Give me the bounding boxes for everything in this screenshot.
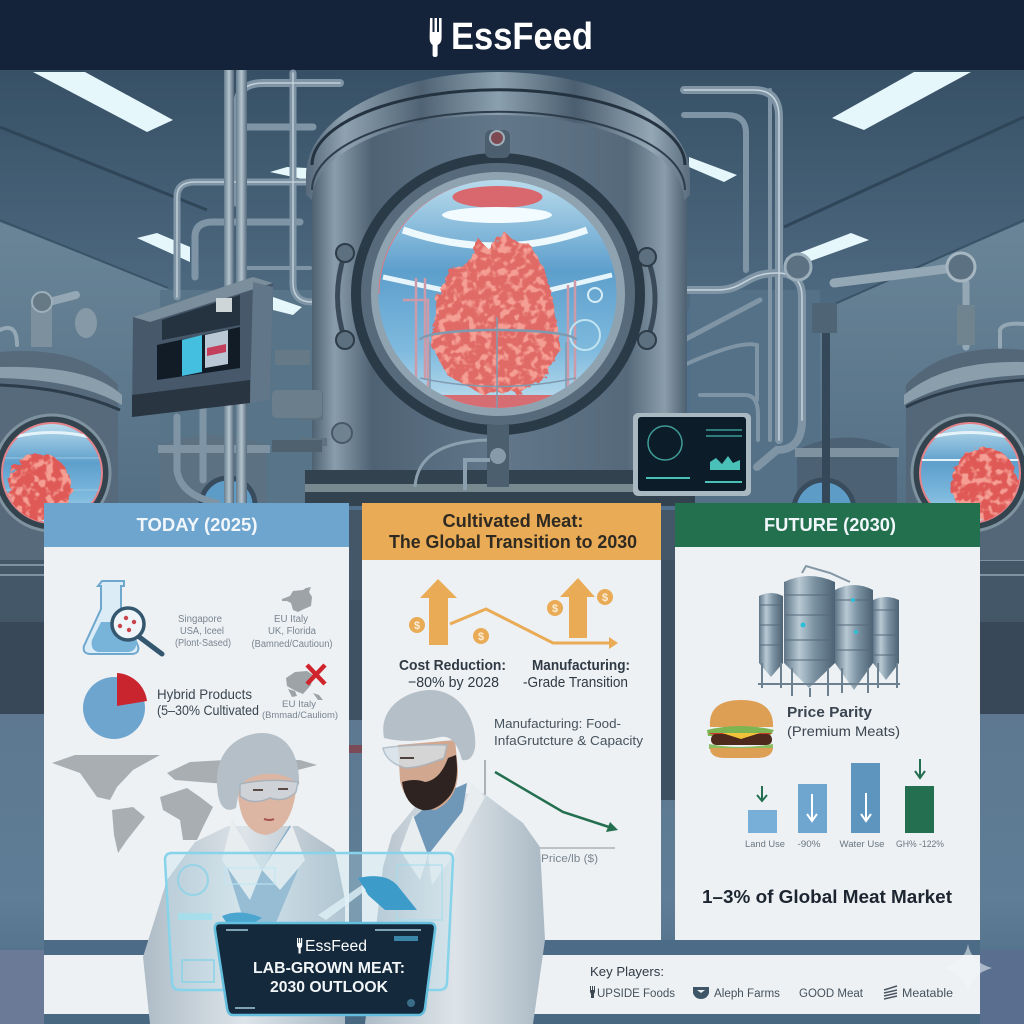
icon: flask with magnifier: [84, 581, 162, 654]
heading: cultivated meat title: The Global Transition to 2030: [389, 532, 637, 552]
tablet heading: LAB-GROWN MEAT:: [253, 960, 405, 977]
right pipes: [684, 90, 802, 467]
icon: map with red cross: [286, 665, 325, 700]
chart: cost arrows and coins: $: [602, 592, 608, 604]
chart: cost arrows and coins: [409, 578, 618, 649]
header bar: [0, 0, 1024, 70]
icon: burger: [707, 700, 774, 758]
scientist: woman: [143, 733, 345, 1024]
icon: sparkle: [944, 944, 992, 992]
text: restricted regions: UK, Florida: [268, 626, 316, 637]
heading: future: [675, 503, 980, 547]
text: permitted regions: [175, 614, 231, 649]
porthole clamps and valves: [272, 130, 656, 490]
text: restricted regions: EU Italy: [274, 614, 308, 625]
text: price parity: (Premium Meats): [787, 723, 900, 739]
bar chart: footprint: -90%: [798, 839, 821, 850]
control panel: [132, 277, 273, 417]
text: infrastructure: [494, 716, 644, 748]
robot arm left: [0, 292, 97, 347]
porthole rings: [351, 153, 645, 435]
bar chart: footprint: Water Use: [840, 839, 884, 850]
logo: good meat: GOOD Meat: [799, 988, 864, 1000]
panel: future: [675, 503, 980, 940]
holographic glass panel: [165, 853, 453, 990]
icon: grey map blob: [282, 587, 312, 612]
text: banned regions: [262, 699, 338, 721]
text: restricted regions: [252, 614, 332, 650]
panel: transition: [362, 503, 661, 940]
scientist: man: [365, 690, 545, 1024]
tablet heading: [253, 960, 405, 996]
monitor: [633, 413, 751, 496]
brand name: EssFeed: [451, 16, 593, 58]
porthole glass: [378, 180, 616, 408]
tablet heading: 2030 OUTLOOK: [270, 979, 388, 996]
bar chart: footprint: Land Use: [745, 839, 785, 850]
tablet brand: EssFeed: [305, 938, 367, 955]
text: cost reduction: Cost Reduction:: [399, 657, 506, 674]
left pipes: [177, 73, 340, 503]
text: restricted regions: (Bamned/Cautioun): [252, 639, 332, 650]
tank body: [312, 114, 687, 500]
chart: cost arrows and coins: $: [478, 631, 484, 643]
text: hybrid products: Hybrid Products: [157, 686, 252, 702]
text: cost reduction: −80% by 2028: [408, 674, 499, 691]
text: banned regions: EU Italy: [282, 699, 316, 710]
text: banned regions: (Bmmad/Cauliom): [262, 710, 338, 721]
footer bar: key players: [44, 955, 980, 1014]
text: hybrid products: (5–30% Cultivated: [157, 702, 259, 718]
bar chart: footprint: GH% -122%: [896, 839, 944, 850]
pie chart: [83, 673, 147, 739]
logo: meatable: [884, 986, 953, 1000]
text: price parity: [787, 704, 900, 739]
line chart: price per lb: [485, 760, 618, 865]
heading: cultivated meat title: Cultivated Meat:: [442, 511, 584, 531]
panel: today: [44, 503, 349, 940]
icon: tablet fork logo: [297, 938, 302, 954]
text: manufacturing: Manufacturing:: [532, 657, 630, 674]
heading: today: [44, 503, 349, 547]
text: key players heading: Key Players:: [590, 965, 664, 979]
world map: [52, 755, 317, 853]
text: permitted regions: Singapore: [178, 614, 222, 625]
robot arm right: [785, 253, 1024, 508]
text: manufacturing: [523, 657, 630, 691]
side tank left: [0, 351, 122, 560]
text: infrastructure: Manufacturing: Food-: [494, 716, 621, 731]
chart: cost arrows and coins: $: [414, 620, 420, 632]
back pipes and equipment: [0, 70, 1024, 540]
tank lid rim: [306, 72, 690, 200]
logo: meatable: Meatable: [902, 988, 953, 1000]
text: infrastructure: InfaGrutcture & Capacity: [494, 733, 644, 748]
heading: today: TODAY (2025): [136, 515, 258, 535]
heading: future: FUTURE (2030): [764, 515, 896, 535]
text: market share: 1–3% of Global Meat Market: [702, 887, 952, 907]
cultured meat mass: [431, 232, 560, 393]
icon: fork logo: [430, 18, 442, 57]
logo: aleph farms: [693, 987, 780, 1000]
line chart: price per lb: Price/lb ($): [541, 853, 598, 865]
text: cost reduction: [399, 657, 506, 691]
tablet: [215, 923, 435, 1015]
logo: upside foods: UPSIDE Foods: [597, 988, 675, 1000]
glove and pipette: [358, 876, 417, 910]
chart: cost arrows and coins: $: [552, 603, 558, 615]
icon: steel silos: [758, 566, 900, 697]
tank base: [305, 470, 695, 506]
text: manufacturing: -Grade Transition: [523, 674, 628, 691]
bar chart: footprint: [745, 759, 944, 850]
text: permitted regions: USA, Iceel: [180, 626, 224, 637]
side tank right: [904, 349, 1024, 560]
decorative ceiling lights: [33, 72, 971, 315]
text: price parity: Price Parity: [787, 704, 873, 721]
text: hybrid products: [157, 686, 259, 718]
text: permitted regions: (Plont-Sased): [175, 638, 231, 649]
logo: aleph farms: Aleph Farms: [714, 988, 780, 1000]
heading: cultivated meat title: [362, 503, 661, 560]
distant small tanks: [158, 435, 899, 540]
main bioreactor: [272, 72, 695, 506]
